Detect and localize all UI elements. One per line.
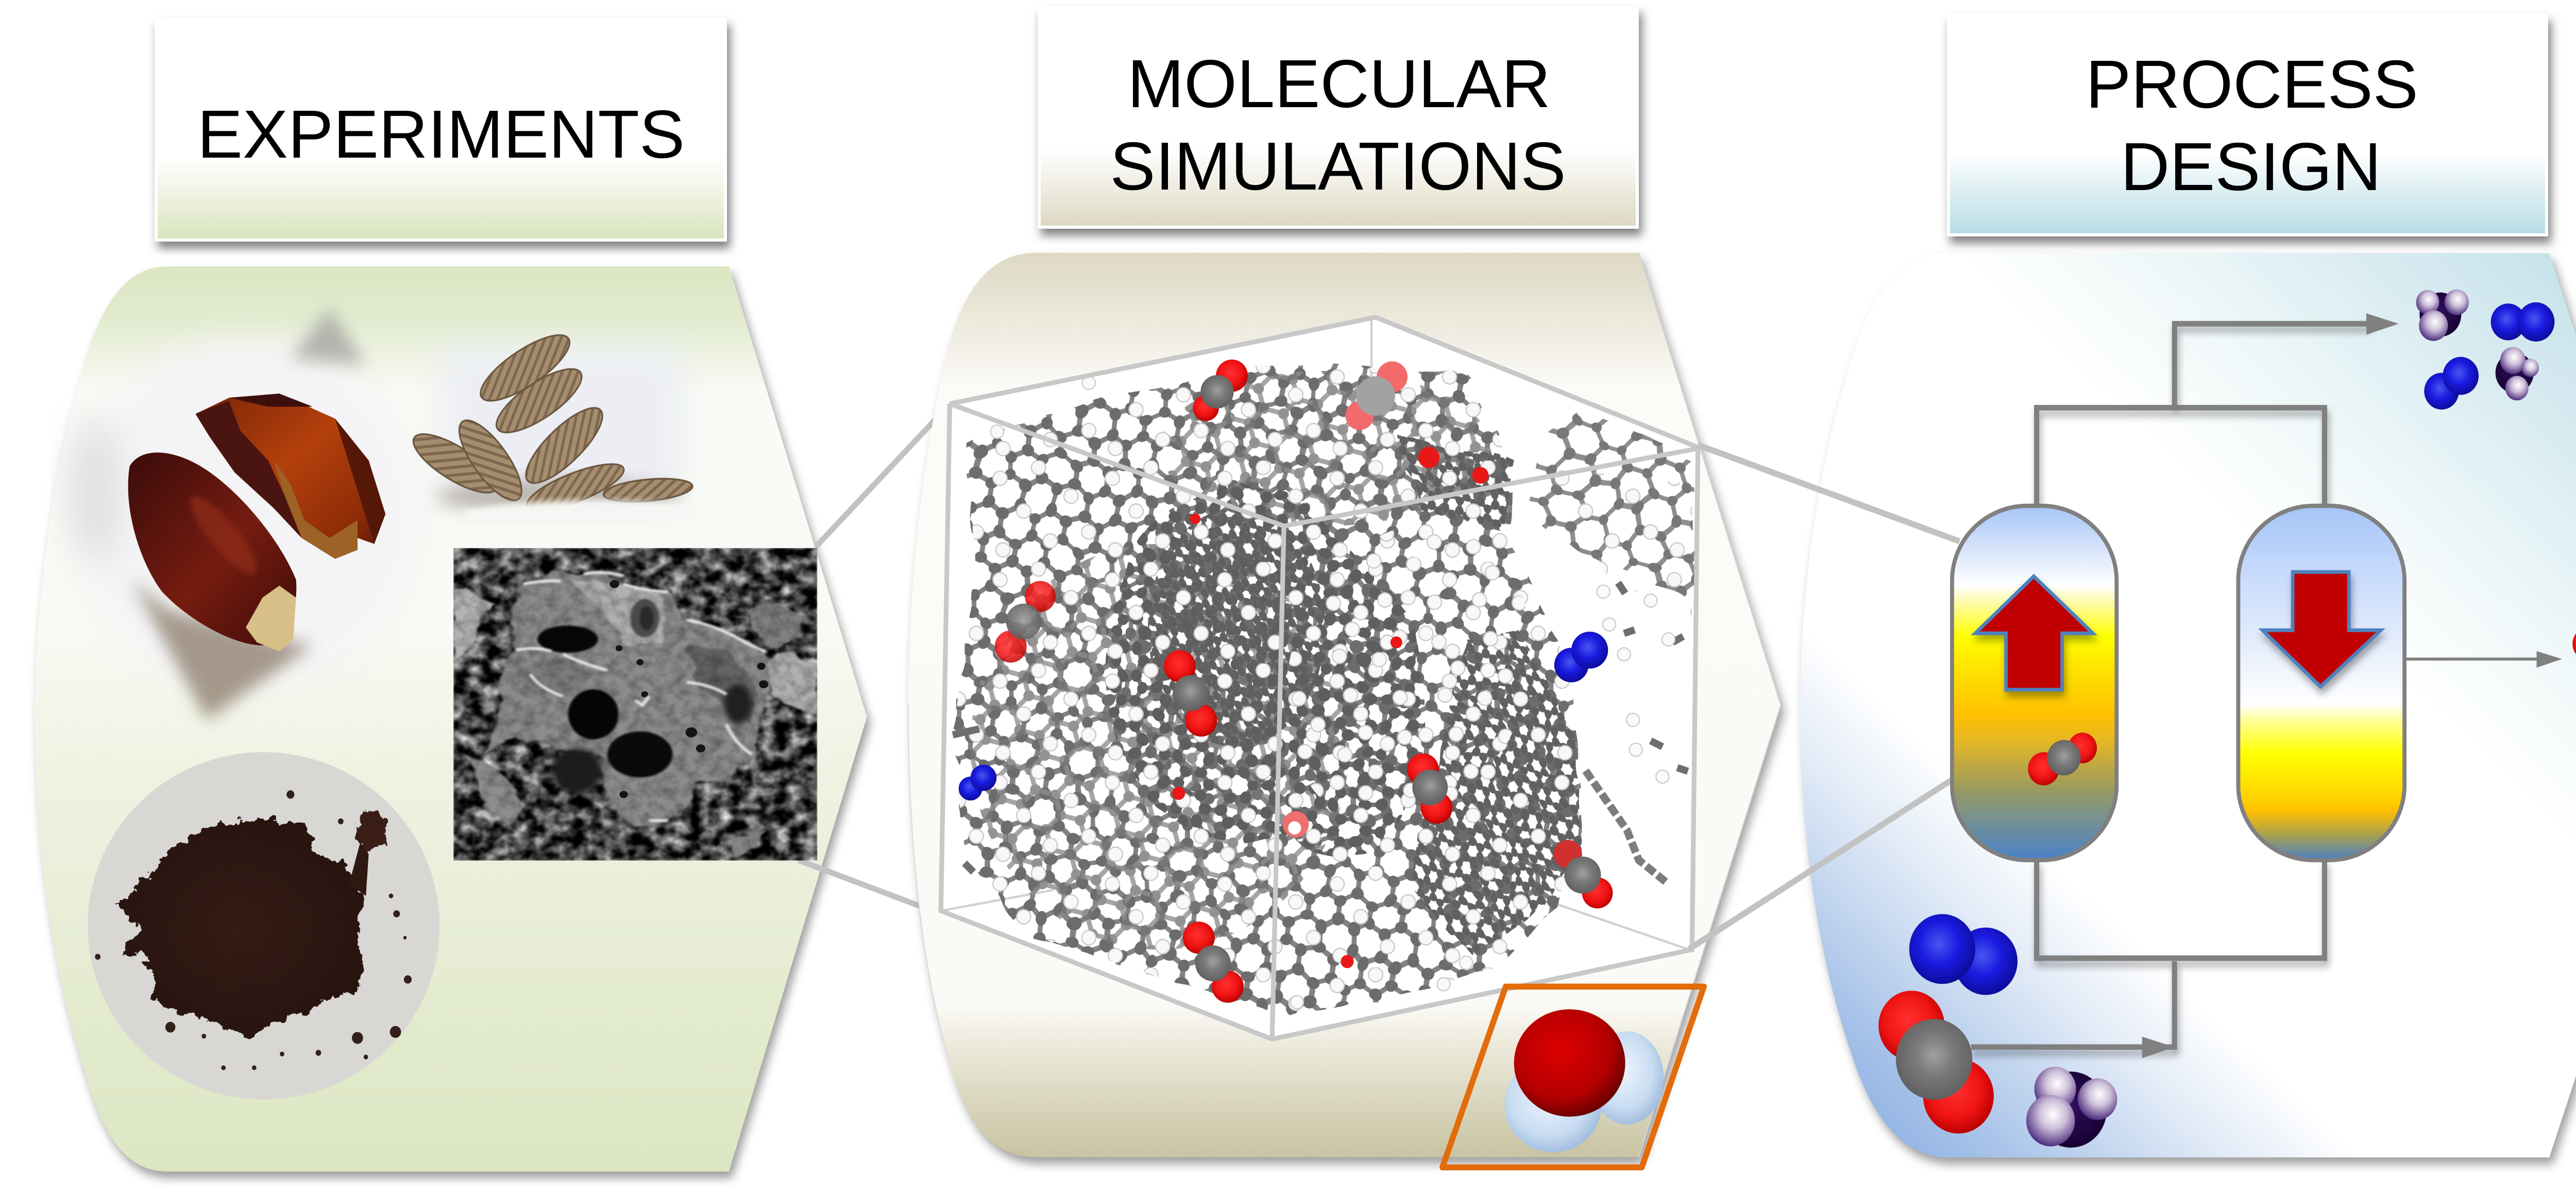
photo: SEM micrograph	[453, 548, 817, 861]
connector: cube to column lower	[1689, 780, 1951, 949]
photo: dates	[67, 308, 419, 720]
carbon network	[953, 365, 1695, 1015]
heading text: process design: PROCESS	[2086, 46, 2418, 122]
connector: SEM to cube lower	[799, 860, 1272, 1039]
photo: powder	[88, 752, 439, 1099]
header: process design	[1947, 14, 2548, 236]
column: adsorption	[1952, 506, 2116, 860]
panel: experiments	[35, 266, 867, 1171]
header: molecular simulations	[1038, 6, 1639, 229]
panel: process design	[1689, 253, 2576, 1157]
product CO2	[2572, 627, 2576, 677]
connector: cube to column upper	[1698, 445, 1960, 541]
CO2 in column	[2028, 732, 2097, 786]
header: experiments	[155, 18, 727, 242]
arrow: vent outlet	[2366, 313, 2399, 335]
process piping top	[2037, 323, 2368, 505]
cube frame	[941, 317, 1698, 1039]
inset: water molecule	[1443, 986, 1704, 1167]
arrow: product outlet	[2536, 651, 2562, 668]
arrow: feed inlet	[2142, 1036, 2175, 1058]
heading text: experiments: EXPERIMENTS	[197, 96, 685, 172]
vent N2	[2491, 302, 2554, 342]
heading text: molecular simulations: MOLECULAR	[1127, 46, 1551, 122]
heading text: process design: DESIGN	[2121, 129, 2381, 204]
feed N2	[1909, 914, 2018, 995]
feed CO2	[1878, 991, 1994, 1133]
N2 molecules	[959, 632, 1608, 800]
panel: molecular simulations	[908, 253, 1781, 1167]
connector: SEM to cube upper	[816, 404, 950, 547]
vent CH4 second	[2496, 347, 2539, 400]
feed CH4	[2026, 1067, 2117, 1148]
arrow: down	[2263, 572, 2381, 687]
photo: date seeds	[406, 323, 693, 523]
pipe: product outlet	[2405, 658, 2539, 660]
CO2 molecules	[995, 360, 1613, 1003]
arrow: up	[1975, 576, 2093, 690]
vent N2 second	[2424, 357, 2479, 410]
column: desorption	[2238, 506, 2404, 860]
vent CH4	[2416, 289, 2469, 341]
simulation cube	[941, 317, 1698, 1039]
process piping bottom	[1971, 860, 2325, 1047]
heading text: molecular simulations: SIMULATIONS	[1110, 128, 1566, 204]
